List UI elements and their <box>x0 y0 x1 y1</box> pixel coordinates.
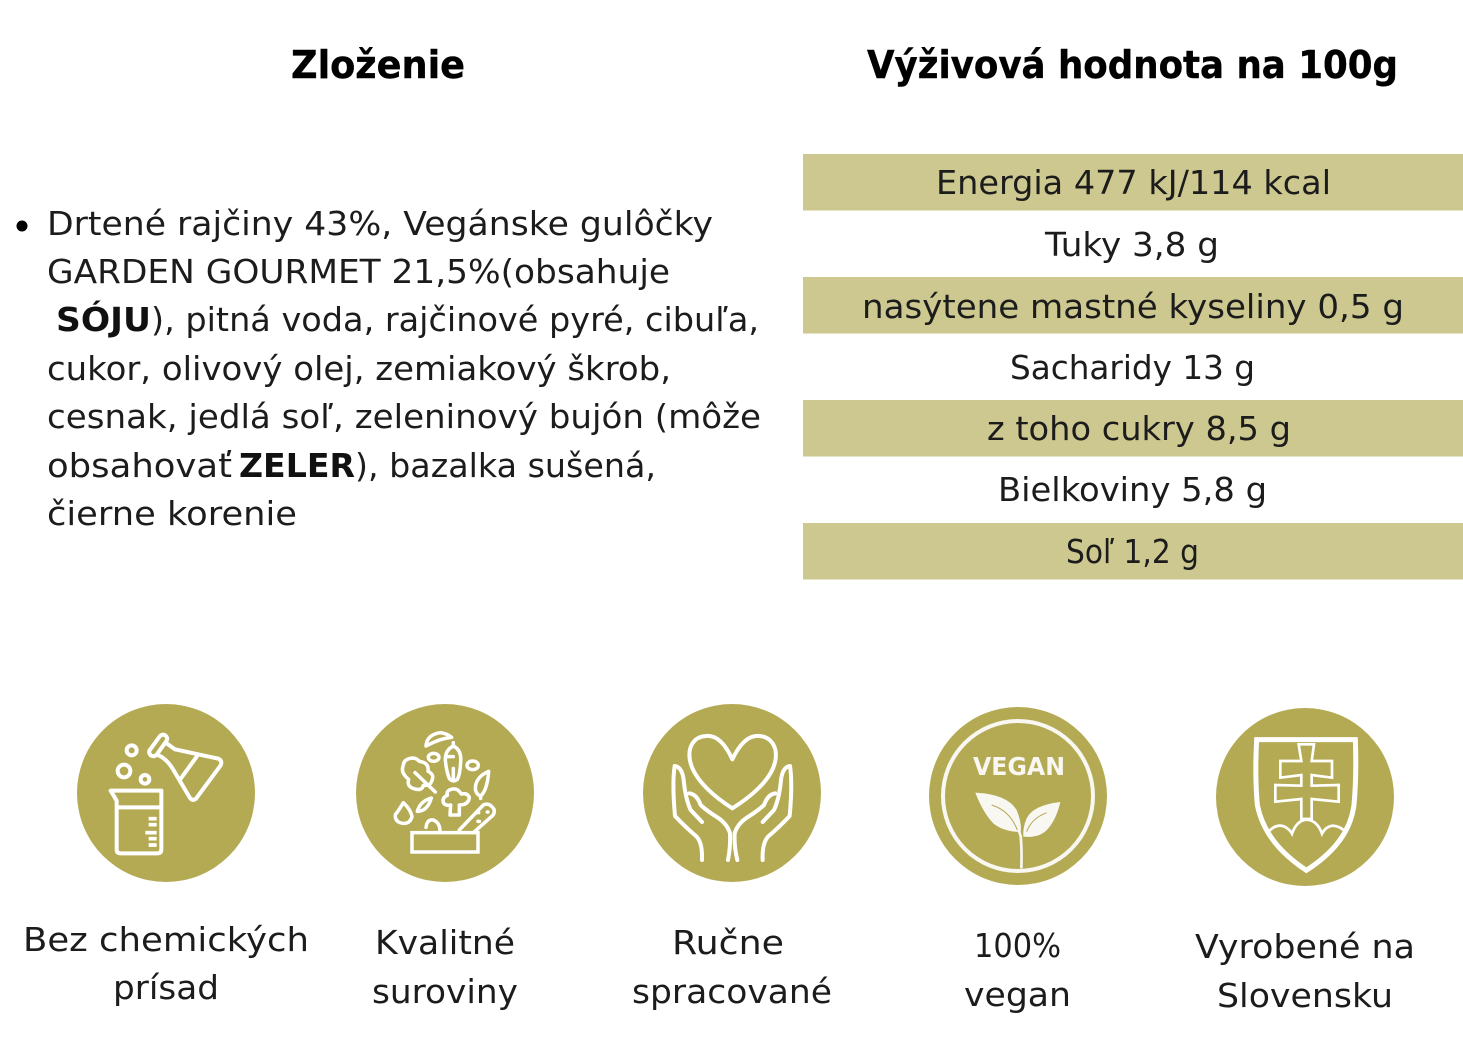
panel: ingredients list <box>16 204 761 533</box>
row: cukry <box>803 400 1463 456</box>
icon: Slovak coat of arms <box>1216 708 1394 886</box>
ingredients text: Drtené rajčiny 43%, Vegánske gulôčky <box>47 204 713 243</box>
ingredients text: čierne korenie <box>47 494 297 533</box>
caption: Kvalitné suroviny <box>372 923 518 1011</box>
caption: Vyrobené na Slovensku <box>1195 927 1415 1015</box>
heading: Výživová hodnota na 100g: Výživová hodnota na 100g <box>867 43 1398 87</box>
row: soľ <box>803 523 1463 580</box>
row: tuky: Tuky 3,8 g <box>1044 225 1219 264</box>
icon: hands holding heart <box>643 704 821 882</box>
row: nasýtené mastné kyseliny: nasýtene mastné kyseliny 0,5 g <box>862 287 1404 326</box>
icon: vegan badge <box>929 707 1107 885</box>
ingredients text: ), pitná voda, rajčinové pyré, cibuľa, <box>151 300 759 339</box>
caption: 100% vegan <box>964 926 1071 1014</box>
caption: Kvalitné suroviny: Kvalitné <box>375 923 515 962</box>
ingredients text: GARDEN GOURMET 21,5%(obsahuje <box>47 252 670 291</box>
icon: laboratory flask and beaker <box>77 704 255 882</box>
row: cukry: z toho cukry 8,5 g <box>987 409 1291 448</box>
caption: Ručne spracované <box>632 923 832 1011</box>
row: soľ: Soľ 1,2 g <box>1066 532 1199 571</box>
row: sacharidy: Sacharidy 13 g <box>1010 348 1255 387</box>
row: energia <box>803 154 1463 210</box>
caption: Bez chemických prísad <box>23 920 309 1007</box>
ingredients text: ZELER <box>239 446 355 485</box>
vegan label: VEGAN <box>973 752 1065 781</box>
caption: Vyrobené na Slovensku: Slovensku <box>1217 976 1393 1015</box>
caption: Bez chemických prísad: prísad <box>113 968 219 1007</box>
caption: 100% vegan: vegan <box>964 975 1071 1014</box>
heading: Zloženie: Zloženie <box>291 43 465 87</box>
icon: vegetables falling into pot <box>356 704 534 882</box>
caption: Vyrobené na Slovensku: Vyrobené na <box>1195 927 1415 966</box>
ingredients text: cukor, olivový olej, zemiakový škrob, <box>47 349 671 388</box>
row: bielkoviny: Bielkoviny 5,8 g <box>998 470 1267 509</box>
panel: nutrition table <box>803 154 1463 580</box>
ingredients text: obsahovať <box>47 446 232 485</box>
caption: Bez chemických prísad: Bez chemických <box>23 920 309 959</box>
ingredients text: cesnak, jedlá soľ, zeleninový bujón (môže <box>47 397 761 436</box>
ingredients text <box>47 204 761 533</box>
caption: 100% vegan: 100% <box>974 926 1061 965</box>
bullet <box>16 220 28 232</box>
row: energia: Energia 477 kJ/114 kcal <box>936 163 1331 202</box>
row: nasýtené mastné kyseliny <box>803 277 1463 334</box>
ingredients text: SÓJU <box>56 299 151 339</box>
caption: Ručne spracované: Ručne <box>672 923 784 962</box>
caption: Ručne spracované: spracované <box>632 972 832 1011</box>
ingredients text: ), bazalka sušená, <box>355 446 656 485</box>
caption: Kvalitné suroviny: suroviny <box>372 972 518 1011</box>
